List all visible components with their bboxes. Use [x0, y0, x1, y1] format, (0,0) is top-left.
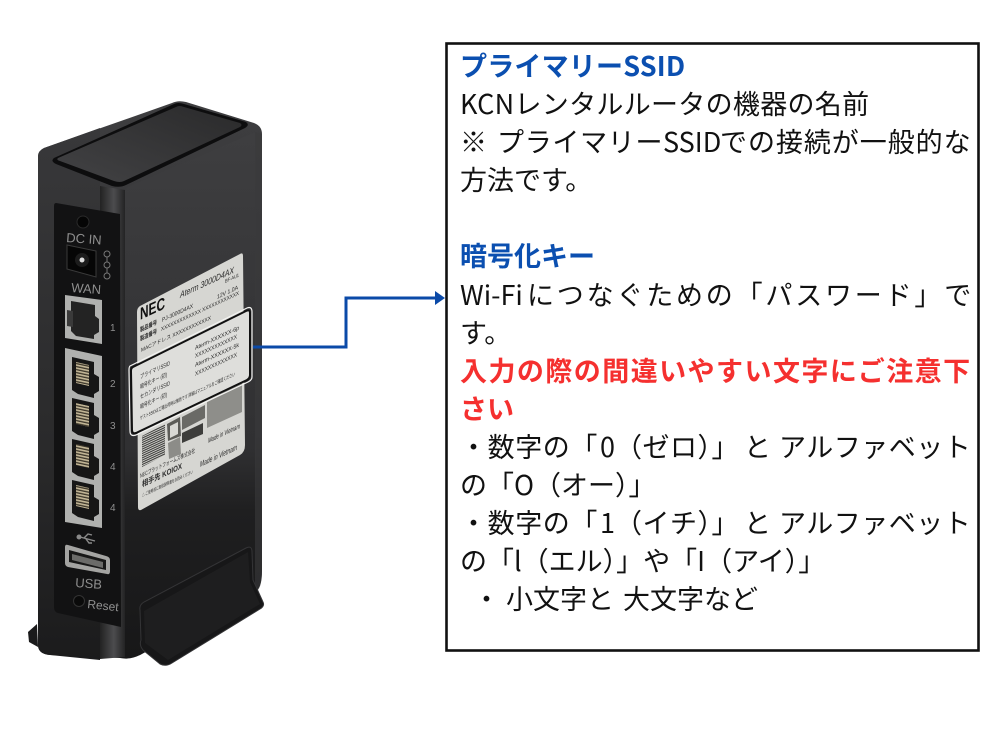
USB port — [65, 545, 110, 574]
panel labels: 2 — [110, 379, 116, 390]
list: confusable characters: アルファベット — [779, 426, 971, 465]
highlighted SSID area: XXXXXXXXXXXXX — [195, 333, 238, 360]
highlighted SSID area: 暗号化キー (初) — [140, 370, 167, 391]
warning text: さい — [460, 388, 514, 427]
list: confusable characters: ・ — [473, 578, 500, 617]
list: confusable characters — [460, 426, 971, 617]
highlighted SSID area: Aterm-XXXXXX-5k — [195, 341, 240, 369]
panel labels: 3 — [110, 421, 116, 432]
panel labels: USB — [75, 575, 103, 592]
WAN port — [65, 295, 102, 344]
label upper text: Aterm 3000D4AX — [179, 265, 234, 301]
highlighted SSID area: プライマリSSID — [140, 359, 170, 381]
highlighted SSID area — [129, 308, 252, 436]
label lower text: Made in Vietnam — [200, 442, 237, 469]
list: confusable characters: ・数字の「 — [460, 426, 598, 465]
label lower text: NECプラットフォームズ株式会社 — [140, 446, 195, 480]
list: confusable characters: 0 — [600, 426, 615, 465]
stand — [140, 547, 264, 665]
label upper text: MACアドレス XXXXXXXXXXXX — [141, 315, 211, 354]
list: confusable characters: の「O（オー）」 — [460, 464, 656, 503]
highlighted SSID area: セカンダリSSID — [140, 378, 170, 401]
highlighted SSID area: 暗号化キー (初) — [140, 390, 167, 411]
panel labels — [66, 230, 120, 614]
text block: primary SSID description: ※ — [460, 121, 487, 160]
text block: encryption key description: Wi-Fi — [460, 274, 523, 313]
highlighted SSID area: Aterm-XXXXXX-6p — [195, 325, 239, 352]
label upper text: 製品番号 — [140, 317, 157, 334]
icon: router device — [28, 101, 264, 665]
reset button — [74, 596, 84, 606]
panel labels: DC IN — [66, 230, 102, 247]
label upper text: NEC — [140, 293, 165, 324]
panel: explanation box — [446, 44, 978, 650]
label lower text: 相手先 KOIOX — [142, 461, 182, 489]
text block: primary SSID description — [460, 83, 972, 198]
panel labels: Reset — [87, 597, 120, 614]
LAN ports — [65, 348, 102, 528]
product label — [137, 253, 245, 510]
rear port panel — [54, 203, 121, 627]
text block: encryption key description: につなぐための「パスワード」で — [527, 274, 974, 313]
panel labels: 4 — [110, 503, 116, 514]
warning text — [460, 350, 972, 427]
panel labels: 1 — [110, 323, 116, 334]
list: confusable characters: の「l（エル）」や「I（アイ）」 — [460, 540, 825, 579]
list: confusable characters: 小文字と — [506, 578, 614, 617]
highlighted SSID area: ゲストSSIDは工場出荷時は無効です 詳細はマニュアルをご確認ください — [140, 370, 235, 422]
panel labels: 4 — [110, 462, 116, 473]
label upper text: BF-AU1 — [225, 273, 239, 285]
list: confusable characters: （イチ）」 — [615, 502, 739, 541]
text block: encryption key description — [460, 274, 974, 351]
list: confusable characters: と — [744, 502, 771, 541]
list: confusable characters: 1 — [600, 502, 615, 541]
heading: primary SSID: プライマリーSSID — [460, 45, 685, 84]
list: confusable characters: （ゼロ）」 — [615, 426, 739, 465]
text block: primary SSID description: KCNレンタルルータの機器の名前 — [460, 83, 869, 122]
label upper text: 製造番号 — [140, 326, 157, 343]
router body — [28, 101, 262, 660]
QR and certification marks — [142, 382, 242, 467]
text block: primary SSID description: プライマリー — [497, 121, 663, 160]
label lower text: △ ご使用前に取扱説明書をお読みください — [142, 468, 193, 499]
text block: encryption key description: す。 — [460, 312, 511, 351]
warning text: 入力の際の間違いやすい文字にご注意下 — [460, 350, 972, 389]
top panel — [52, 103, 248, 187]
label upper text: PJ-3000D4AX — [162, 303, 194, 324]
highlighted SSID area: XXXXXXXXXXXXX — [195, 351, 238, 378]
arrow: label to explanation box — [253, 291, 445, 347]
icon: USB symbol — [77, 534, 95, 543]
label lower text: Made in Vietnam — [208, 421, 240, 445]
heading: encryption key: 暗号化キー — [460, 235, 595, 274]
label upper text: 12V 1.0A — [217, 284, 239, 301]
list: confusable characters: 大文字など — [623, 578, 758, 617]
list: confusable characters: と — [744, 426, 771, 465]
text block: primary SSID description: での接続が一般的な — [720, 121, 972, 160]
text block: primary SSID description: 方法です。 — [460, 159, 592, 198]
panel labels: WAN — [71, 280, 102, 297]
list: confusable characters: ・数字の「 — [460, 502, 598, 541]
label upper text — [140, 265, 239, 354]
power jack — [67, 216, 110, 279]
list: confusable characters: アルファベット — [779, 502, 971, 541]
text block: primary SSID description: SSID — [663, 121, 721, 160]
label lower text — [140, 421, 240, 499]
label upper text: XXXXXXXXXXXXX XXXXXXXXXXXX — [161, 291, 239, 333]
